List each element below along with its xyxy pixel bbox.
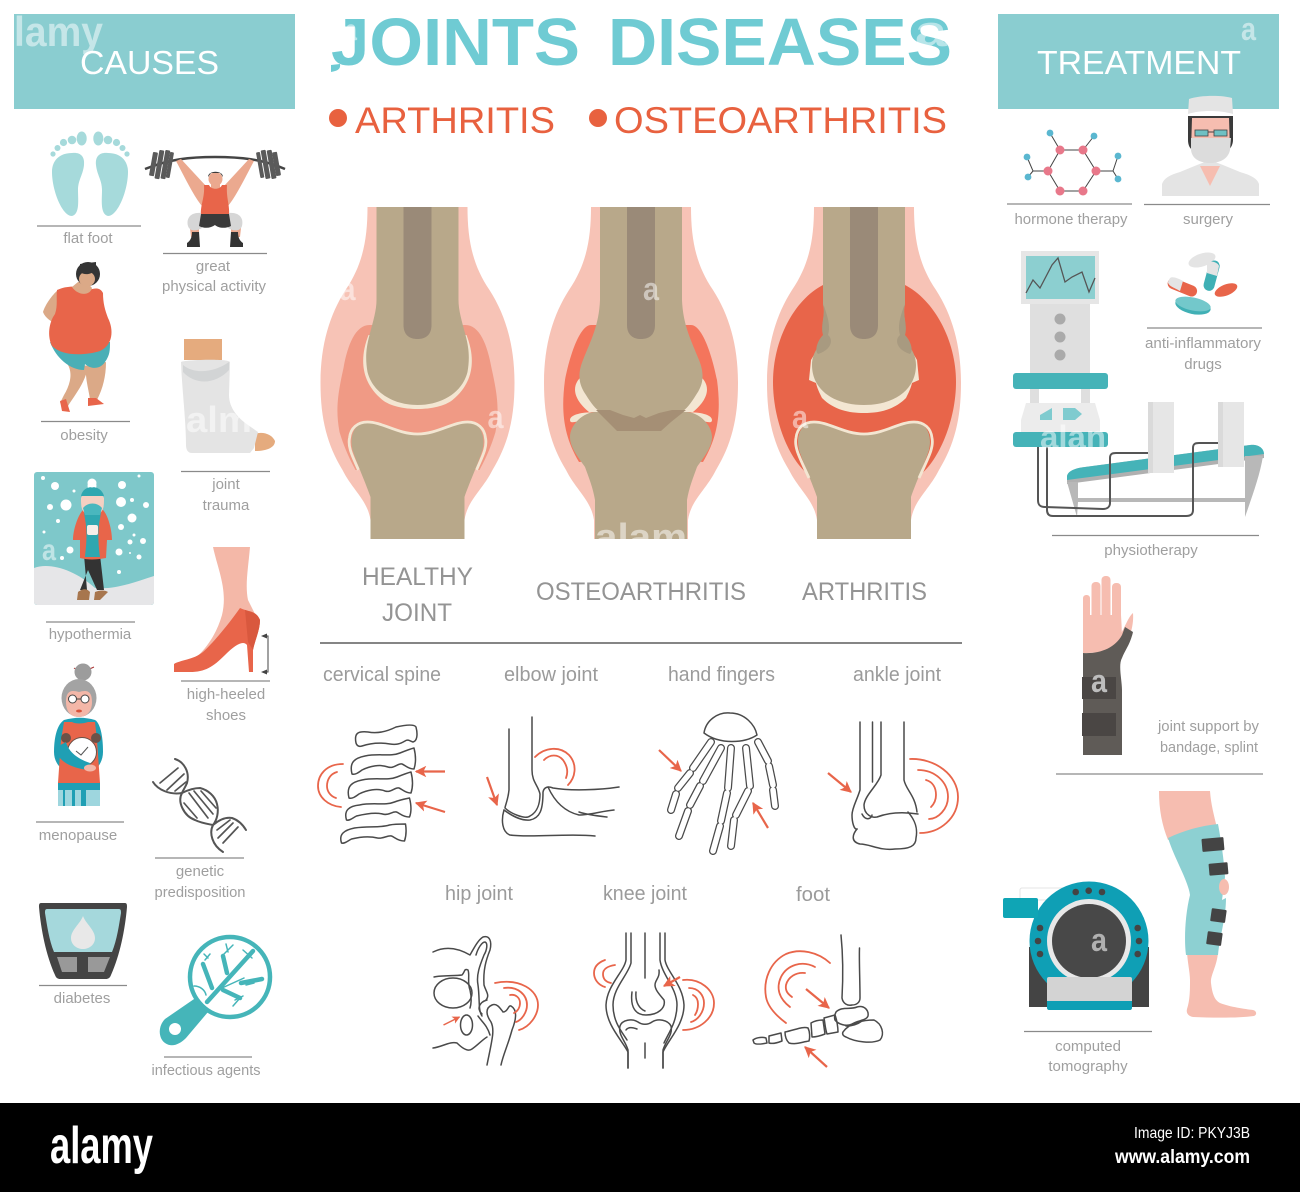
label: cervical spine: cervical spine — [323, 664, 441, 686]
label: great physical activity: great — [196, 258, 231, 275]
label: computed tomography: tomography — [1048, 1058, 1128, 1075]
icon: wrist splint — [1082, 576, 1133, 755]
diagram: healthy joint: a — [488, 399, 504, 435]
heading: treatment — [998, 11, 1279, 109]
title: DISEASES — [608, 5, 952, 80]
label: anti-inflammatory drugs: drugs — [1184, 356, 1222, 373]
label: great physical activity — [162, 254, 267, 295]
heading: treatment: a — [1241, 11, 1256, 47]
diagram: arthritis joint — [767, 207, 961, 539]
panel: joint comparison — [320, 207, 961, 627]
icon: knee brace leg — [1159, 791, 1256, 1018]
title — [331, 5, 952, 80]
label: flat foot: flat foot — [63, 230, 113, 247]
label: high-heeled shoes: shoes — [206, 707, 246, 724]
subtitle: disease names: OSTEOARTHRITIS — [614, 100, 947, 141]
icon: wrist splint: a — [1091, 663, 1107, 699]
diagram: healthy joint: a — [340, 271, 356, 307]
label: high-heeled shoes: high-heeled — [187, 686, 265, 703]
label: flat foot — [37, 226, 141, 247]
icon: knee joint — [594, 933, 714, 1068]
icon: ankle joint — [828, 722, 958, 849]
label: osteoarthritis: OSTEOARTHRITIS — [536, 578, 746, 606]
label: genetic predisposition: predisposition — [154, 884, 246, 901]
icon: physiotherapy machine — [1013, 251, 1264, 517]
label: healthy joint: HEALTHY — [362, 563, 473, 591]
label: genetic predisposition: genetic — [176, 863, 225, 880]
label: anti-inflammatory drugs: anti-inflammatory — [1145, 335, 1261, 352]
label: hypothermia: hypothermia — [49, 626, 132, 643]
icon: foot bones — [753, 935, 882, 1067]
label: joint trauma — [181, 472, 270, 514]
icon: CT scanner — [1003, 882, 1149, 1010]
label: surgery: surgery — [1183, 211, 1234, 228]
diagram: osteoarthritis joint: alam — [595, 516, 687, 557]
label: joint trauma: trauma — [203, 497, 250, 514]
icon: physiotherapy machine: alan — [1040, 419, 1106, 455]
title: a — [915, 7, 948, 56]
label: joint support by bandage, splint: bandage, splint — [1160, 739, 1259, 756]
label: physiotherapy: physiotherapy — [1104, 542, 1198, 559]
icon: surgeon — [1162, 96, 1259, 196]
icon: weightlifter — [145, 150, 285, 247]
label: healthy joint: JOINT — [382, 599, 452, 627]
label: obesity — [41, 422, 130, 444]
label: knee joint: knee joint — [603, 883, 687, 905]
icon: hypothermia: a — [42, 534, 56, 567]
icon: joint trauma cast: alm — [186, 399, 252, 440]
label: ankle joint: ankle joint — [853, 664, 941, 686]
label: hand fingers: hand fingers — [668, 664, 775, 686]
label: joint trauma: joint — [211, 476, 241, 493]
footer bar: www.alamy.com — [1114, 1147, 1250, 1168]
subtitle: disease names: ARTHRITIS — [355, 100, 555, 141]
footer bar — [0, 1103, 1300, 1192]
panel: treatment — [998, 11, 1279, 1075]
footer bar: alamy — [50, 1117, 153, 1175]
heading: causes: CAUSES — [80, 44, 219, 81]
icon: anti-inflammatory pills — [1166, 249, 1239, 318]
label: diabetes — [39, 986, 127, 1007]
icon: joint trauma cast — [181, 339, 275, 453]
icon: magnifier with bacteria — [160, 937, 270, 1045]
diagram: arthritis joint: a — [792, 399, 808, 435]
label: computed tomography: computed — [1055, 1038, 1121, 1055]
panel: affected joints — [318, 664, 958, 1068]
label: computed tomography — [1024, 1032, 1152, 1075]
label: hormone therapy: hormone therapy — [1014, 211, 1128, 228]
label: menopause — [36, 822, 124, 844]
icon: hand skeleton — [659, 713, 775, 851]
label: joint support by bandage, splint: joint support by — [1157, 718, 1259, 735]
title: JOINTS — [331, 5, 580, 80]
heading: treatment: TREATMENT — [1037, 44, 1241, 81]
label: elbow joint: elbow joint — [504, 664, 598, 686]
icon: elbow joint — [487, 717, 619, 836]
label: high-heeled shoes — [181, 681, 270, 724]
label: foot: foot — [796, 884, 830, 906]
label: arthritis: ARTHRITIS — [802, 578, 927, 606]
icon: CT scanner: a — [1091, 922, 1107, 958]
label: hip joint: hip joint — [445, 883, 513, 905]
subtitle: disease names — [329, 100, 947, 141]
diagram: osteoarthritis joint: a — [643, 271, 659, 307]
heading: causes: lamy — [14, 8, 104, 55]
label: healthy joint — [362, 563, 473, 627]
icon: DNA helix — [153, 759, 246, 852]
diagram: osteoarthritis joint — [544, 207, 738, 557]
icon: high-heeled shoe — [174, 547, 268, 674]
label: menopause: menopause — [39, 827, 117, 844]
icon: cervical spine — [318, 725, 445, 843]
icon: obesity — [43, 262, 112, 412]
label: surgery — [1144, 204, 1270, 228]
label: joint support by bandage, splint — [1056, 718, 1263, 774]
diagram: healthy joint — [320, 207, 514, 539]
heading: causes — [14, 8, 295, 109]
label: anti-inflammatory drugs — [1145, 328, 1262, 373]
icon: flat foot — [50, 132, 130, 216]
footer bar: Image ID: PKYJ3B — [1134, 1125, 1250, 1142]
panel: causes — [14, 8, 295, 1079]
icon: menopause woman — [54, 664, 103, 806]
icon: hormone molecule — [1024, 130, 1121, 196]
label: diabetes: diabetes — [54, 990, 110, 1007]
label: great physical activity: physical activity — [162, 278, 266, 295]
label: hormone therapy — [1007, 204, 1132, 228]
label: infectious agents: infectious agents — [152, 1062, 260, 1079]
label: genetic predisposition — [154, 858, 246, 901]
label: obesity: obesity — [60, 427, 108, 444]
icon: hip joint — [433, 937, 538, 1065]
icon: hypothermia — [34, 472, 154, 605]
title: a — [345, 14, 357, 47]
icon: glucose meter — [39, 903, 127, 979]
